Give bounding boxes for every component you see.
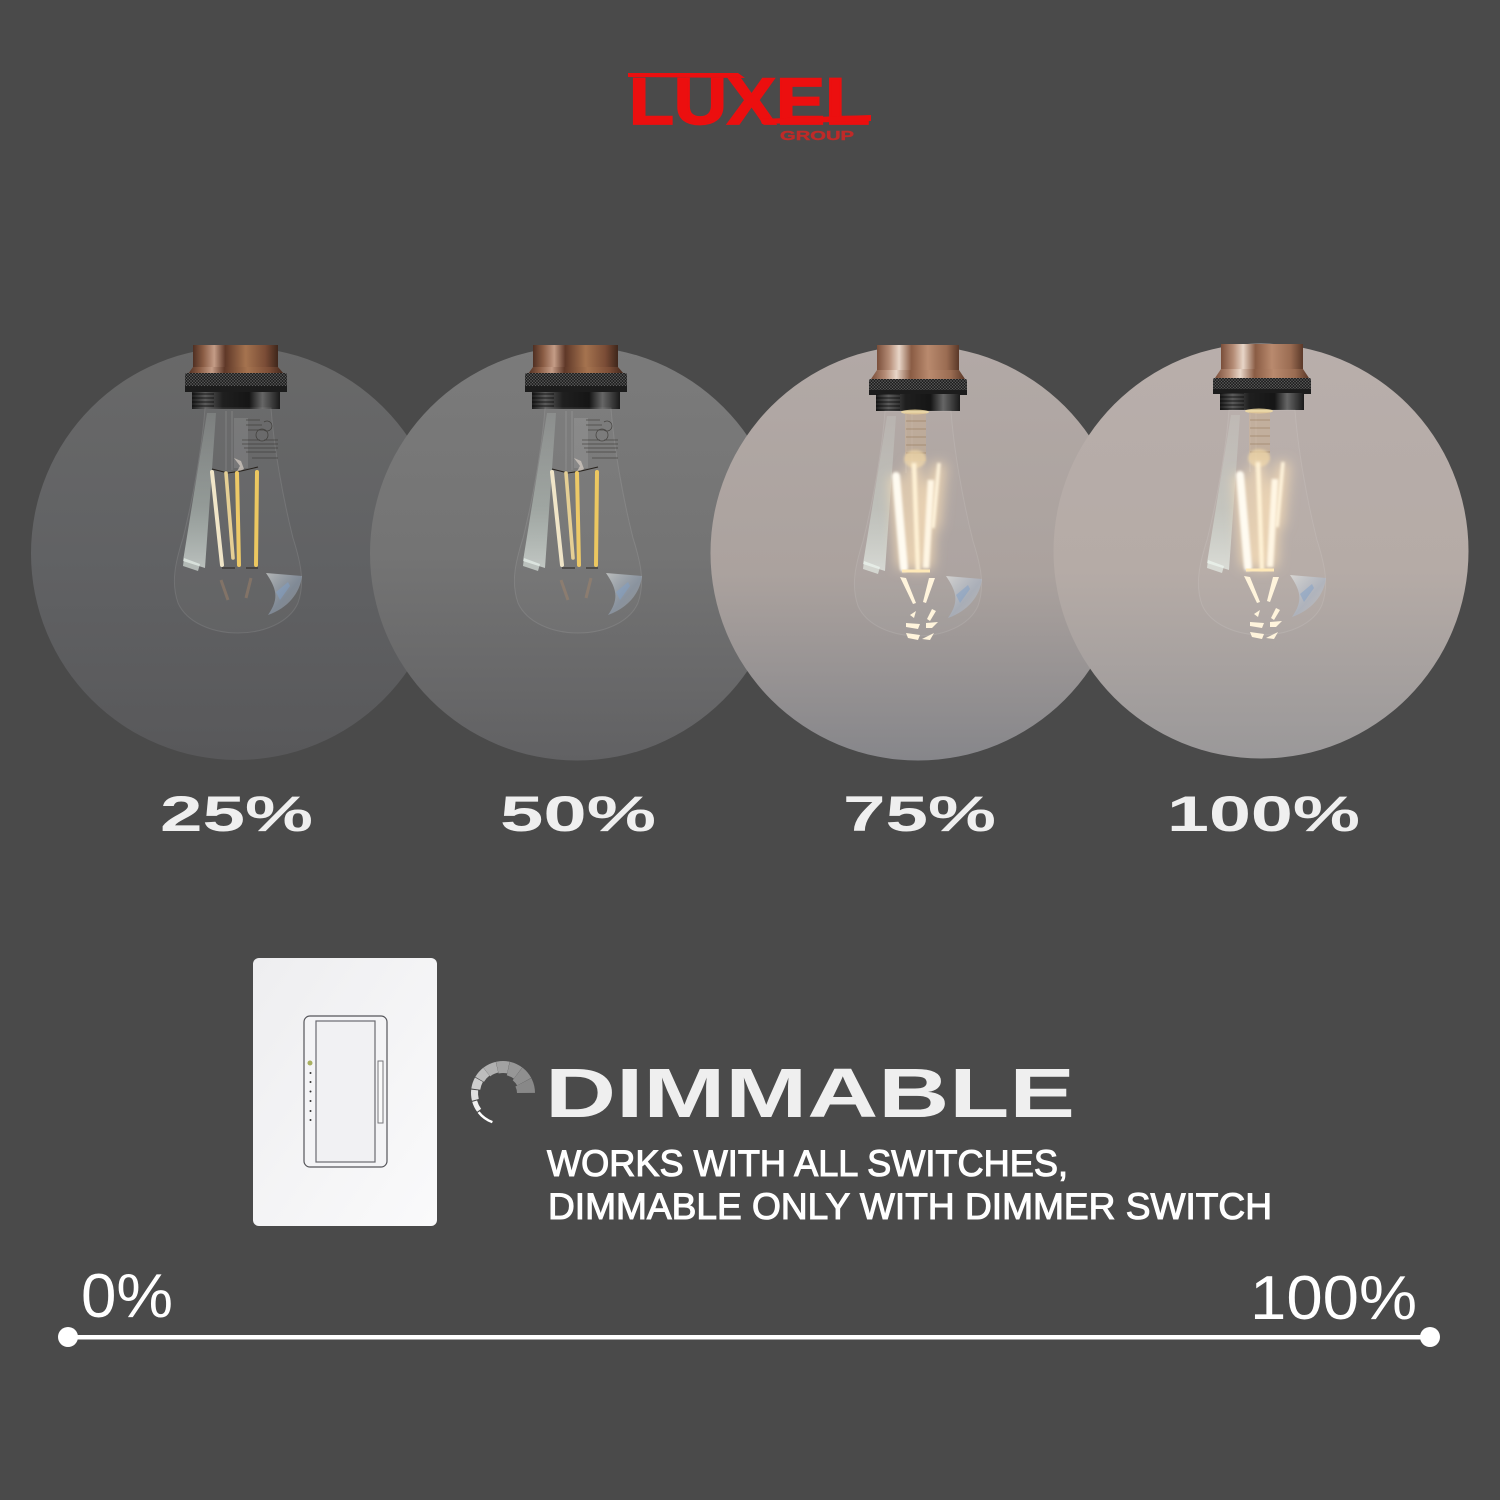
text block: switch compatibility: WORKS WITH ALL SWITCHES, [547,1143,1068,1184]
logo: Luxel Group: LUXEL [629,64,870,138]
slider line [68,1335,1430,1340]
panel: 75% brightness bulb [710,345,1126,760]
icon: dimmer switch [253,958,437,1226]
text block: switch compatibility [547,1143,1272,1227]
panel: 100% brightness bulb [1054,344,1468,758]
scale: dimming range [58,1262,1440,1347]
icon: dimming dial [462,1052,544,1134]
bulb: 75% [854,345,982,640]
circle: 100% [1054,344,1468,758]
heading: DIMMABLE: DIMMABLE [545,1054,1075,1132]
label: 75%: 75% [843,786,996,842]
label: 100%: 100% [1250,1264,1417,1333]
label: 100%: 100% [1167,786,1360,842]
circle: 25% [31,347,444,760]
panel: 50% brightness bulb [370,345,784,760]
label: 25%: 25% [160,786,313,842]
circle: 75% [710,346,1126,760]
logo: Luxel Group: GROUP [780,128,855,143]
label: 0%: 0% [81,1262,173,1331]
bulb: 50% [514,345,642,633]
slider end dot [1420,1327,1440,1347]
slider start dot [58,1327,78,1347]
circle: 50% [370,346,784,760]
label: 50%: 50% [500,786,656,842]
text block: switch compatibility: DIMMABLE ONLY WITH DIMMER SWITCH [548,1186,1272,1227]
panel: 25% brightness bulb [31,345,444,760]
bulb: 25% [174,345,302,633]
bulb: 100% [1198,344,1326,639]
